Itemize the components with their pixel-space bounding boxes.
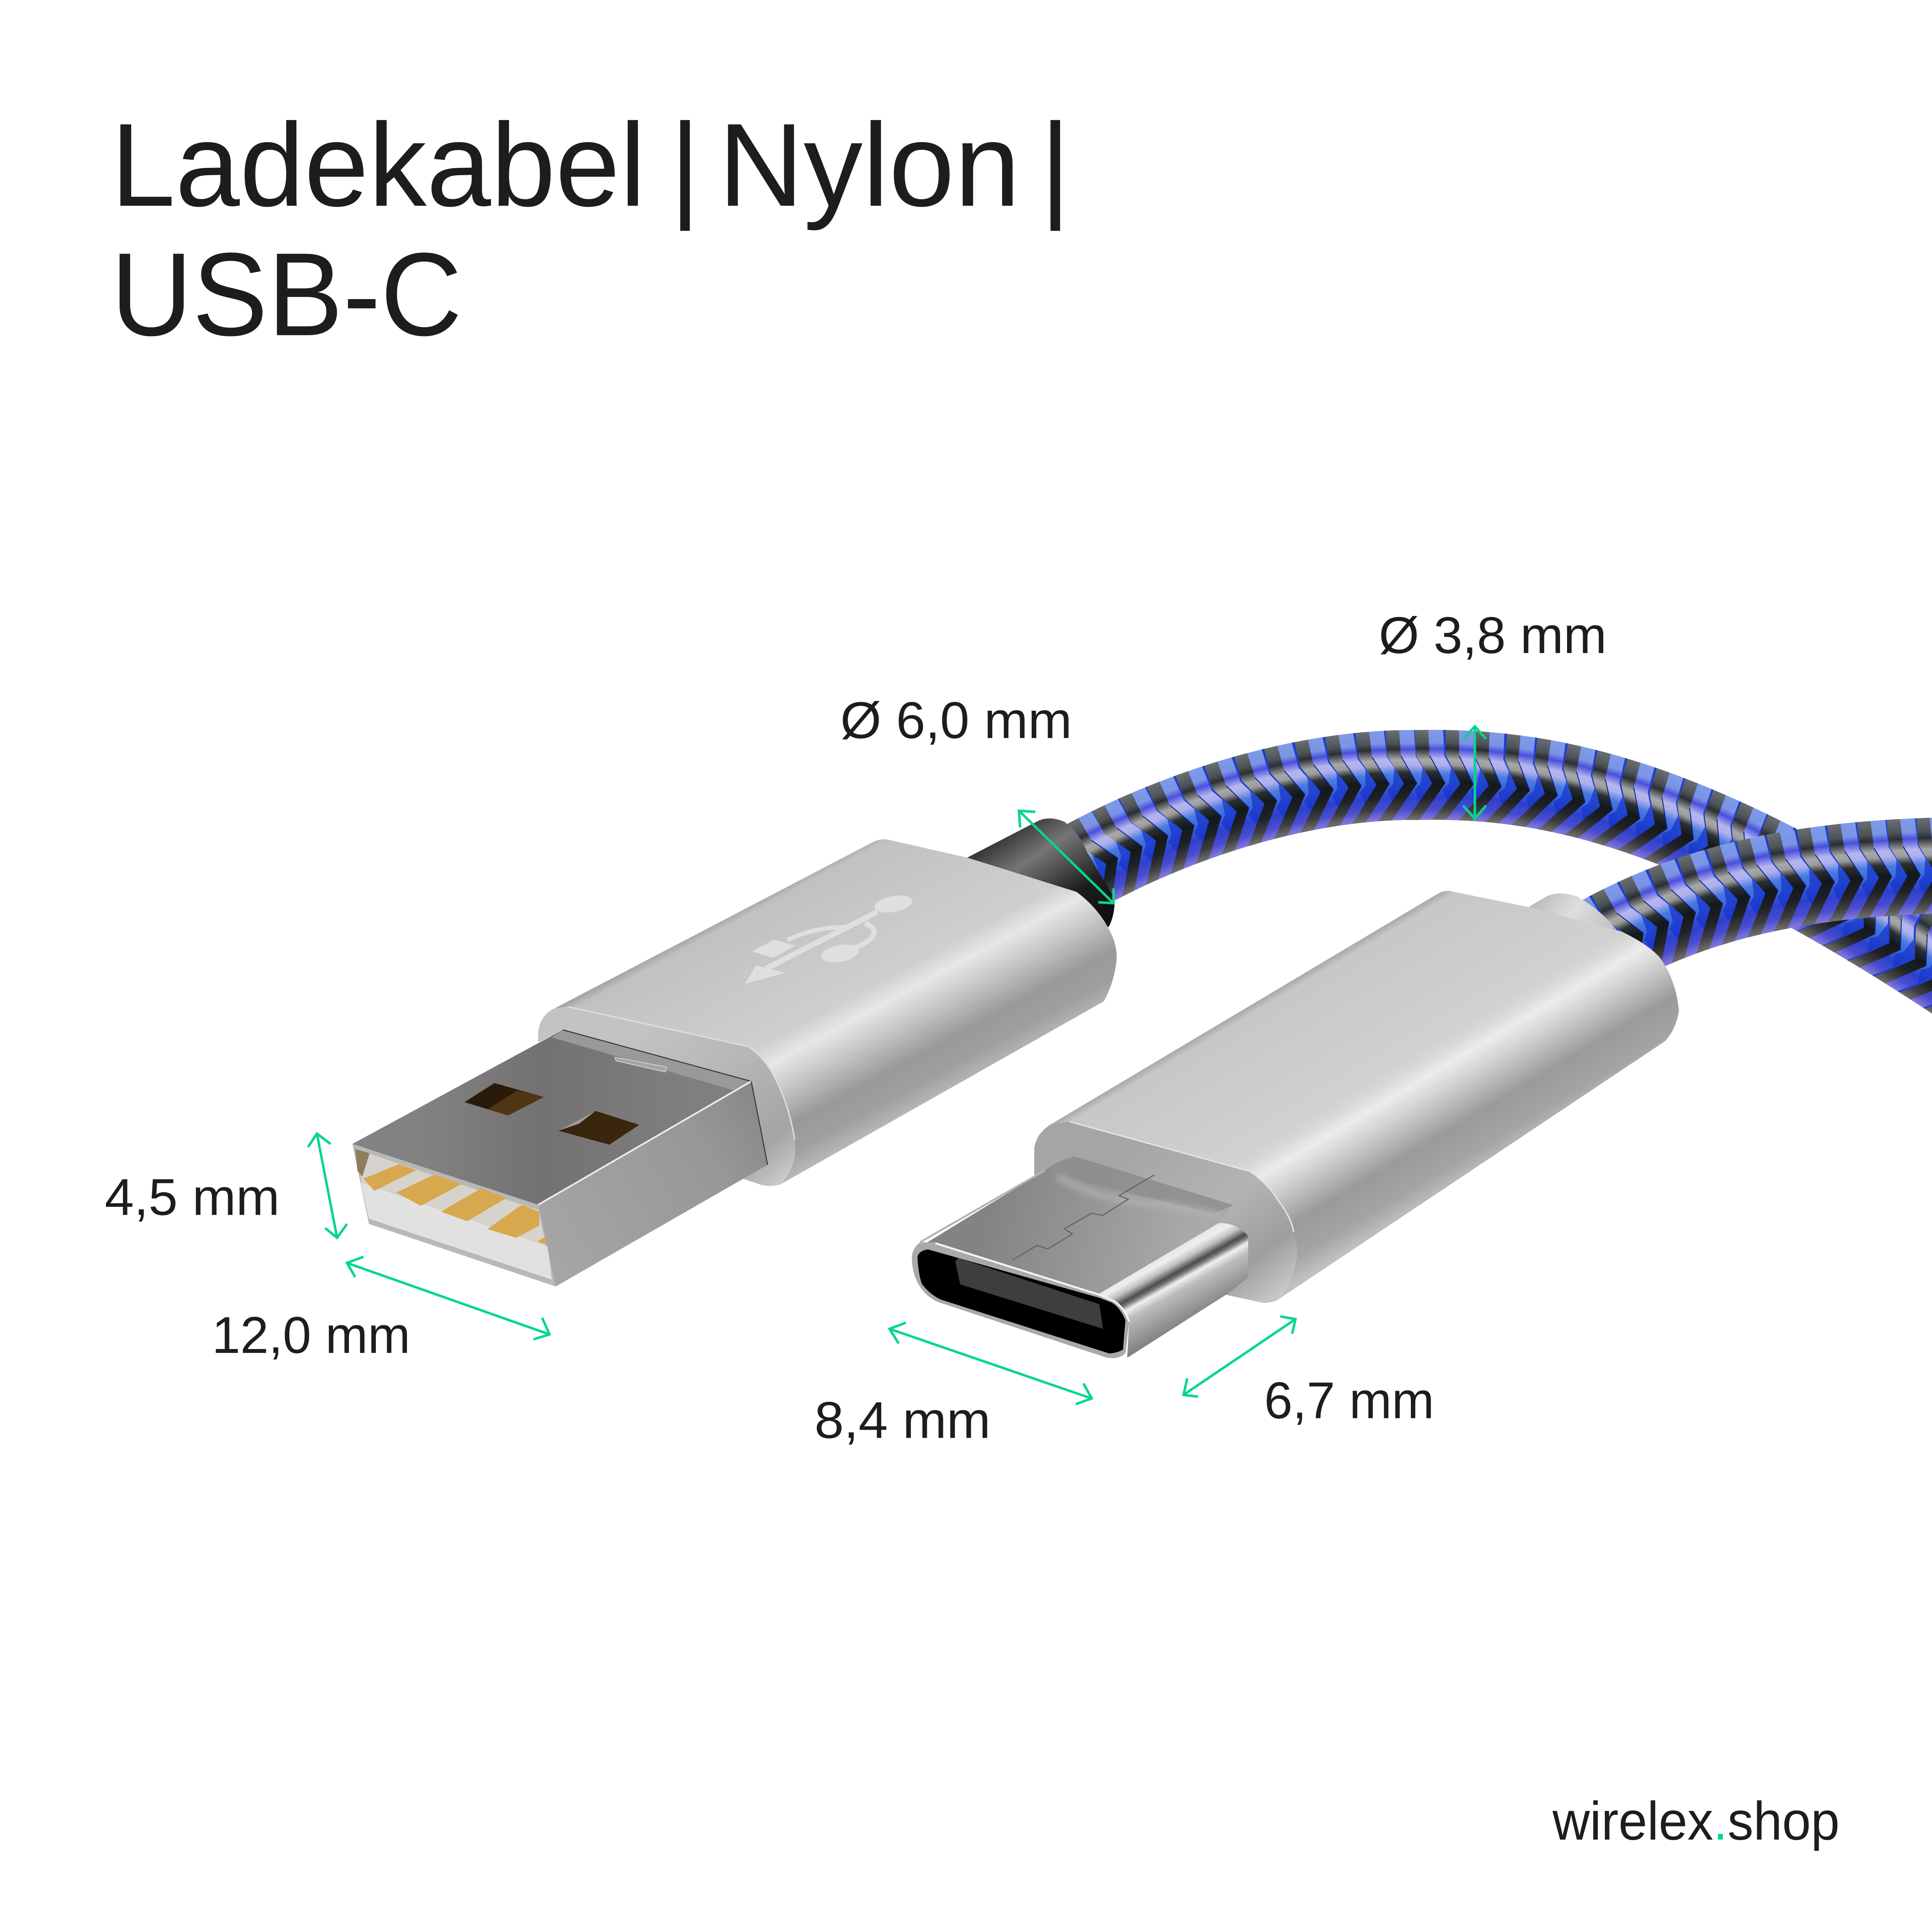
USB-A strain relief bbox=[967, 819, 1115, 937]
dimension arrow: USB-A width 12.0 mm bbox=[347, 1257, 549, 1339]
USB-A metal housing bbox=[538, 839, 1117, 1186]
USB-C strain relief neck bbox=[1529, 893, 1614, 949]
dimension arrow: strain relief 6.0 mm bbox=[1019, 811, 1113, 903]
USB-C plug top shell bbox=[928, 1156, 1233, 1294]
USB-C tongue bbox=[955, 1258, 1103, 1329]
label: USB-C height: 6,7 mm bbox=[1264, 1372, 1434, 1430]
USB trident logo bbox=[745, 893, 914, 984]
USB-A front opening bbox=[352, 1144, 556, 1286]
dimension arrow: USB-C height 6.7 mm bbox=[1184, 1316, 1296, 1397]
USB-A housing front bevel bbox=[538, 1007, 795, 1186]
title: | bbox=[670, 99, 700, 232]
title bbox=[111, 99, 1071, 361]
retention hole bbox=[558, 1111, 639, 1145]
USB-C plug side shell bbox=[1099, 1223, 1248, 1358]
USB-C housing front bevel bbox=[1034, 1122, 1297, 1303]
USB-C black opening bbox=[918, 1249, 1125, 1354]
label: cable diameter: Ø 3,8 mm bbox=[1379, 607, 1607, 664]
dimension arrow: cable diameter 3.8 mm bbox=[1463, 726, 1486, 819]
label: USB-A width: 12,0 mm bbox=[212, 1307, 410, 1364]
label: USB-A height: 4,5 mm bbox=[105, 1169, 280, 1226]
label: USB-C width: 8,4 mm bbox=[814, 1391, 991, 1449]
retention hole bbox=[465, 1083, 544, 1115]
braided nylon cable from USB-A plug bbox=[1067, 730, 1932, 1013]
USB-C metal housing bbox=[1034, 891, 1679, 1303]
label: strain relief diameter: Ø 6,0 mm bbox=[840, 692, 1072, 749]
title: | bbox=[1040, 99, 1071, 232]
USB-C metal rim bbox=[912, 1242, 1129, 1358]
USB-A plug side shell bbox=[538, 1081, 768, 1286]
small slot bbox=[615, 1057, 667, 1072]
brand: wirelex.shop: wirelex.shop bbox=[1552, 1791, 1840, 1851]
USB-C connector bbox=[912, 891, 1679, 1358]
gold contacts bbox=[363, 1164, 546, 1245]
title: Ladekabel bbox=[111, 99, 646, 231]
dimension arrow: USB-A height 4.5 mm bbox=[308, 1134, 347, 1238]
USB-A plug top shell bbox=[352, 1030, 751, 1205]
title: USB-C bbox=[111, 229, 462, 361]
USB-A connector bbox=[352, 839, 1117, 1286]
seam line bbox=[1013, 1175, 1155, 1260]
braided nylon cable from USB-C plug bbox=[1583, 818, 1932, 966]
title: Nylon bbox=[719, 99, 1020, 232]
dimension arrow: USB-C width 8.4 mm bbox=[889, 1323, 1092, 1404]
